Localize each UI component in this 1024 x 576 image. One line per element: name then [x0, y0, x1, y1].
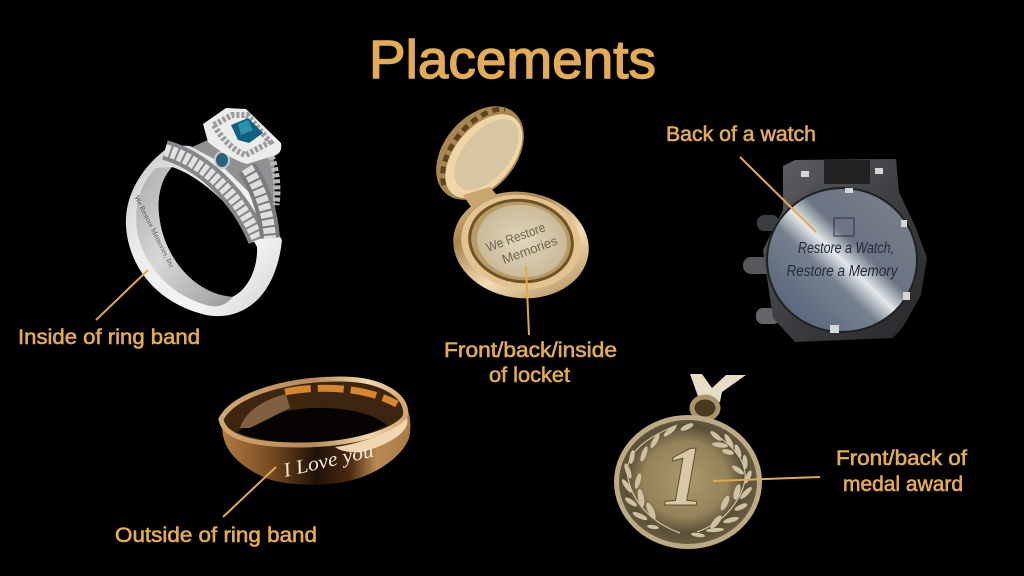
watch dial: [766, 187, 918, 333]
ring opening: [237, 408, 387, 443]
label: outside of ring band: Outside of ring band: [115, 524, 317, 547]
ribbon: [690, 374, 746, 402]
numeral: 1: [662, 428, 706, 524]
photo: silver ring with blue gem: [126, 108, 282, 316]
ring rim: [221, 379, 406, 445]
label: back of a watch: Back of a watch: [666, 123, 816, 146]
inscription: We Restore Memories, Inc: [132, 194, 177, 270]
locket engraving: We Restore: [484, 220, 547, 255]
photo: medal: [614, 374, 762, 549]
laurel right: [691, 430, 753, 538]
label: inside of ring band: Inside of ring band: [18, 326, 200, 349]
locket engraving: [484, 220, 560, 267]
photo: gold ring: [221, 379, 410, 485]
locket face: [472, 199, 572, 283]
side gem: [215, 152, 229, 168]
ring band exterior: [222, 405, 410, 485]
label: front/back/inside of locket: [444, 339, 617, 387]
ring inner wall: [221, 379, 406, 445]
blue gem: [231, 118, 263, 143]
label: front/back of medal award: [836, 447, 967, 496]
inner band: [136, 167, 233, 306]
label: front/back of medal award: medal award: [843, 473, 963, 496]
watch engraving: [786, 240, 899, 280]
leader: outside of ring band: [223, 467, 276, 517]
case screws: [801, 168, 910, 333]
leader: back of watch: [740, 157, 816, 232]
label: front/back/inside of locket: Front/back/inside: [444, 339, 617, 362]
laurel left: [620, 422, 694, 533]
diamond bands: [165, 150, 258, 240]
hinge: [463, 187, 496, 207]
leader: locket: [526, 266, 529, 335]
halo setting: [203, 108, 281, 164]
watch engraving: Restore a Memory: [786, 263, 899, 280]
medal disc: [614, 415, 762, 549]
watch case: [763, 159, 927, 342]
locket engraving: Memories: [500, 233, 560, 267]
band highlight: [335, 418, 408, 452]
inner glow: [285, 388, 397, 404]
photo: back of watch: [743, 159, 927, 342]
medal loop: [692, 397, 718, 419]
locket lid: [418, 89, 542, 217]
title: Placements: [369, 30, 656, 90]
leader: inside of ring band: [96, 270, 148, 320]
leader: medal award: [713, 477, 820, 481]
watch engraving: Restore a Watch,: [798, 240, 894, 257]
ring engraving: I Love you: [280, 440, 376, 482]
gallery behind gem: [190, 130, 276, 245]
label: front/back of medal award: Front/back of: [836, 447, 967, 470]
logo: [834, 218, 854, 236]
locket body: [446, 183, 596, 307]
label: front/back/inside of locket: of locket: [489, 364, 570, 387]
photo: gold locket: [418, 89, 596, 307]
crown and pushers: [743, 215, 780, 324]
ring band: [126, 145, 282, 316]
